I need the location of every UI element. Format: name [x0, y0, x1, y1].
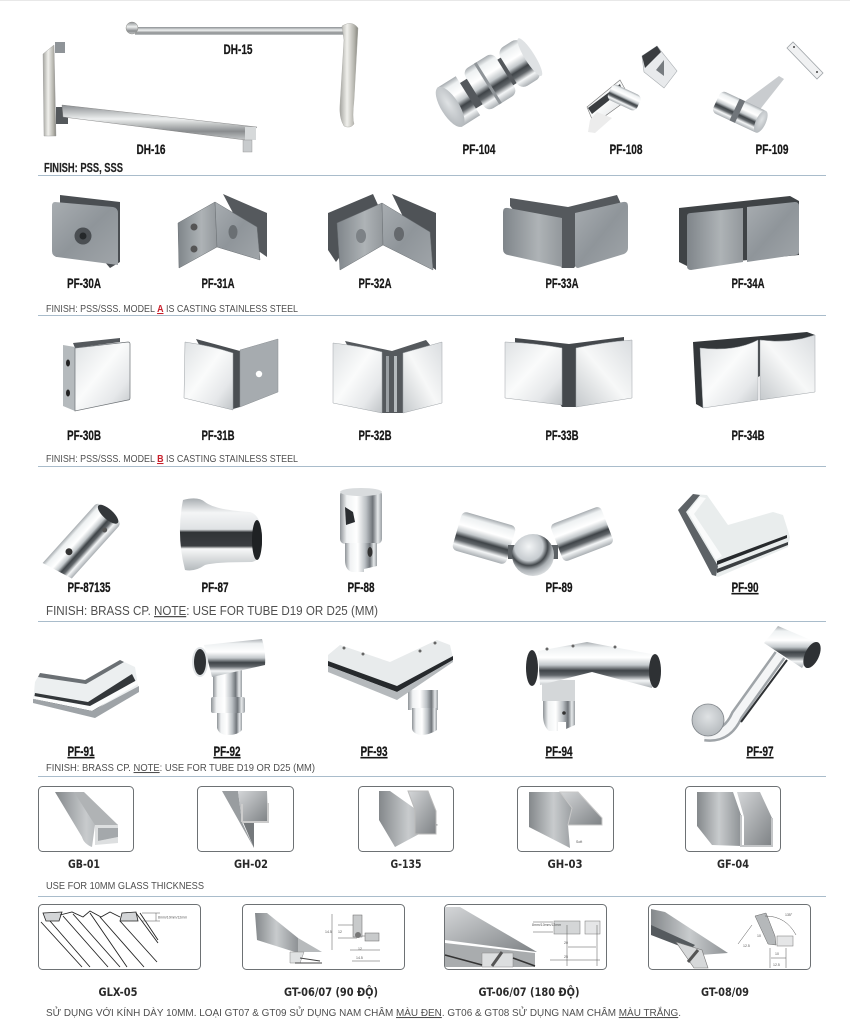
icon: PF-31A — [178, 194, 267, 268]
icon: PF-91 — [33, 660, 139, 718]
label: GH-02: GH-02 — [234, 857, 268, 871]
label: PF-34B: PF-34B — [732, 427, 764, 443]
box: GLX-05 profile — [38, 904, 200, 970]
label: GT-08/09: GT-08/09 — [701, 985, 749, 999]
box: GH-03 profile: Soft — [576, 840, 582, 844]
icon: PF-93 — [328, 640, 453, 735]
label: PF-104: PF-104 — [462, 141, 496, 157]
box: GH-03 profile — [518, 786, 614, 852]
note: magnet colours: SỬ DỤNG VỚI KÍNH DÀY 10MM. LOẠI GT07 & GT09 SỬ DỤNG NAM CHÂM MÀU ĐEN. GT06 & GT08 SỬ DỤNG NAM CHÂM MÀU TRẮNG. — [46, 1006, 681, 1019]
icon: PF-33B — [505, 337, 632, 407]
box: GB-01 profile — [38, 786, 134, 852]
note: 10mm glass thickness: USE FOR 10MM GLASS THICKNESS — [46, 880, 204, 892]
icon: PF-31B — [184, 339, 278, 410]
icon: PF-108 latch — [587, 46, 677, 133]
icon: PF-32A — [328, 194, 436, 270]
box: GT-06/07 90 degree profile: 12 — [338, 930, 342, 934]
label: PF-32B: PF-32B — [358, 427, 392, 443]
box: GT-08/09 profile: 10 — [775, 952, 779, 956]
box: GT-06/07 180 degree profile: 8mm/10mm/12mm — [532, 923, 561, 927]
icon: PF-94 — [526, 642, 661, 731]
icon: PF-30A — [52, 195, 120, 268]
box: GT-06/07 90 degree profile: 14.5 — [325, 930, 332, 934]
label: PF-32A: PF-32A — [358, 275, 392, 291]
label: PF-33B: PF-33B — [546, 427, 578, 443]
icon: PF-30B — [63, 338, 130, 411]
note: finish PSS, SSS: FINISH: PSS, SSS — [44, 160, 123, 175]
box: GT-06/07 180 degree profile: 20 — [564, 941, 568, 945]
label: PF-34A: PF-34A — [732, 275, 764, 291]
label: PF-91: PF-91 — [68, 743, 95, 759]
box: GT-06/07 90 degree profile — [242, 904, 404, 970]
panel: tube connectors row 2 — [33, 626, 824, 774]
note: model A finish: FINISH: PSS/SSS. MODEL A IS CASTING STAINLESS STEEL — [46, 303, 298, 315]
label: PF-31A: PF-31A — [202, 275, 234, 291]
label: PF-90: PF-90 — [732, 579, 759, 595]
label: PF-97: PF-97 — [746, 743, 774, 759]
icon: DH-15 handle — [126, 22, 358, 127]
box: GT-08/09 profile: 12.5 — [773, 963, 780, 967]
note: tube D19 or D25: FINISH: BRASS CP. NOTE: USE FOR TUBE D19 OR D25 (MM) — [46, 762, 315, 774]
label: PF-108: PF-108 — [610, 141, 643, 157]
box: GT-08/09 profile: 12.5 — [743, 944, 750, 948]
note: tube D19 or D25: FINISH: BRASS CP. NOTE: USE FOR TUBE D19 OR D25 (MM) — [46, 604, 378, 618]
panel: model A clamps — [46, 194, 799, 315]
note: model B finish: FINISH: PSS/SSS. MODEL B IS CASTING STAINLESS STEEL — [46, 453, 298, 465]
icon: PF-109 latch — [711, 42, 823, 135]
box: GT-08/09 profile: 135° — [785, 913, 793, 917]
icon: PF-88 — [340, 488, 382, 572]
icon: PF-33A — [503, 195, 628, 268]
label: PF-88: PF-88 — [348, 579, 375, 595]
label: DH-16: DH-16 — [136, 141, 166, 157]
label: PF-30B: PF-30B — [67, 427, 101, 443]
icon: PF-104 knob — [430, 34, 547, 132]
label: PF-33A: PF-33A — [546, 275, 578, 291]
panel: magnetic seal profiles — [38, 904, 810, 1019]
label: GLX-05: GLX-05 — [98, 985, 138, 999]
box: GT-06/07 180 degree profile — [444, 904, 606, 970]
label: PF-31B: PF-31B — [202, 427, 234, 443]
label: PF-87135: PF-87135 — [68, 579, 111, 595]
label: GH-03: GH-03 — [548, 857, 582, 871]
box: GT-08/09 profile — [648, 904, 810, 970]
icon: PF-87 — [180, 498, 262, 570]
box: G-135 profile — [358, 786, 454, 852]
panel: door handles and knobs — [43, 22, 823, 175]
icon: DH-16 handle — [43, 42, 257, 152]
label: PF-109: PF-109 — [756, 141, 789, 157]
label: PF-93: PF-93 — [360, 743, 388, 759]
label: GF-04: GF-04 — [717, 857, 749, 871]
icon: PF-87135 — [43, 500, 123, 584]
label: PF-94: PF-94 — [546, 743, 573, 759]
icon: PF-34A — [679, 196, 799, 270]
panel: model B clamps — [46, 332, 815, 465]
box: GLX-05 profile: 8mm/10mm/12mm — [158, 916, 187, 920]
icon: PF-90 — [678, 494, 790, 577]
panel: glass seal profiles — [38, 786, 780, 892]
label: PF-30A: PF-30A — [67, 275, 101, 291]
label: DH-15: DH-15 — [224, 41, 253, 57]
panel: tube connectors row 1 — [43, 488, 790, 618]
box: GH-02 profile — [198, 786, 294, 852]
box: GT-08/09 profile: 10 — [757, 934, 761, 938]
box: GT-06/07 90 degree profile: 14.5 — [356, 956, 363, 960]
label: G-135: G-135 — [390, 857, 422, 871]
label: GT-06/07 180 degrees: GT-06/07 (180 ĐỘ) — [478, 984, 580, 999]
icon: PF-97 — [692, 626, 824, 736]
icon: PF-89 — [452, 506, 614, 576]
icon: PF-32B — [333, 340, 442, 413]
label: GT-06/07 90 degrees: GT-06/07 (90 ĐỘ) — [284, 984, 378, 999]
label: PF-87: PF-87 — [202, 579, 229, 595]
label: GB-01: GB-01 — [68, 857, 100, 871]
label: PF-92: PF-92 — [214, 743, 241, 759]
box: GT-06/07 90 degree profile: 12 — [358, 947, 362, 951]
label: PF-89: PF-89 — [546, 579, 573, 595]
icon: PF-92 — [192, 639, 265, 735]
icon: PF-34B — [693, 332, 815, 408]
box: GT-06/07 180 degree profile: 25 — [564, 955, 568, 959]
box: GF-04 profile — [686, 786, 780, 852]
